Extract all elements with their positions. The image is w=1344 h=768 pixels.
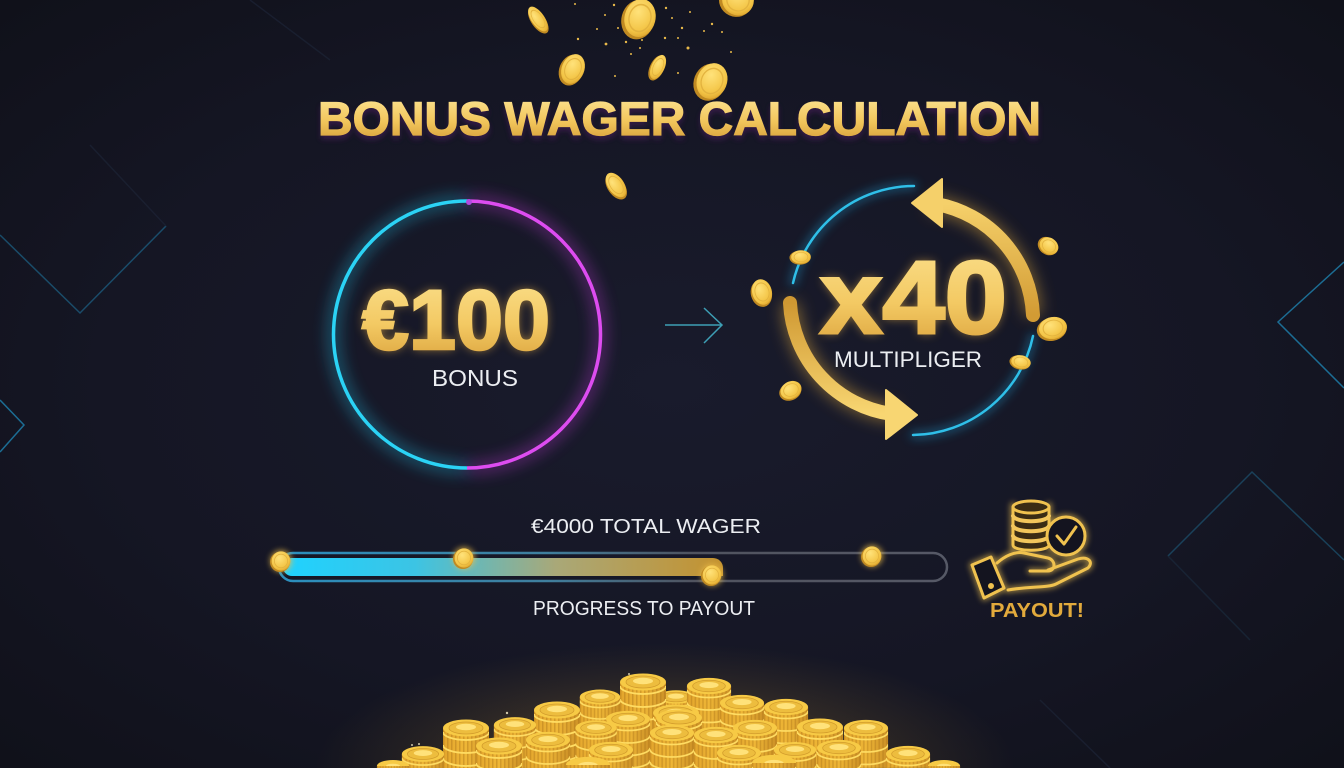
arrow: upper gold cycle [912, 179, 1033, 315]
progress bar [270, 545, 947, 586]
icon: payout hand with coins [972, 501, 1090, 598]
progress label: PROGRESS TO PAYOUT [533, 598, 755, 620]
amount: €100 [362, 273, 550, 367]
milestone coins [270, 545, 883, 586]
panel: bonus ring [334, 199, 600, 468]
arrow: lower gold cycle [790, 303, 917, 439]
multiplier value: x40 [820, 240, 1007, 355]
coin pile [315, 643, 1015, 768]
falling coins and sparkles [523, 0, 759, 203]
wager label: €4000 TOTAL WAGER [531, 516, 761, 538]
panel: multiplier ring [747, 179, 1069, 439]
title: BONUS WAGER CALCULATION [318, 92, 1041, 145]
progress fill [283, 558, 723, 576]
multiplier value: x40 [820, 240, 1007, 355]
multiplier label: MULTIPLIGER [834, 347, 982, 372]
bonus label: BONUS [432, 365, 518, 391]
amount: €100 [362, 273, 550, 367]
glow behind gold arrows [790, 204, 1033, 414]
arrow: bonus to multiplier [665, 308, 722, 343]
payout label: PAYOUT! [990, 600, 1084, 622]
title: BONUS WAGER CALCULATION [318, 96, 1041, 149]
blue arcs [793, 186, 1033, 435]
neon ring [334, 199, 600, 468]
orbiting coins [747, 233, 1069, 404]
